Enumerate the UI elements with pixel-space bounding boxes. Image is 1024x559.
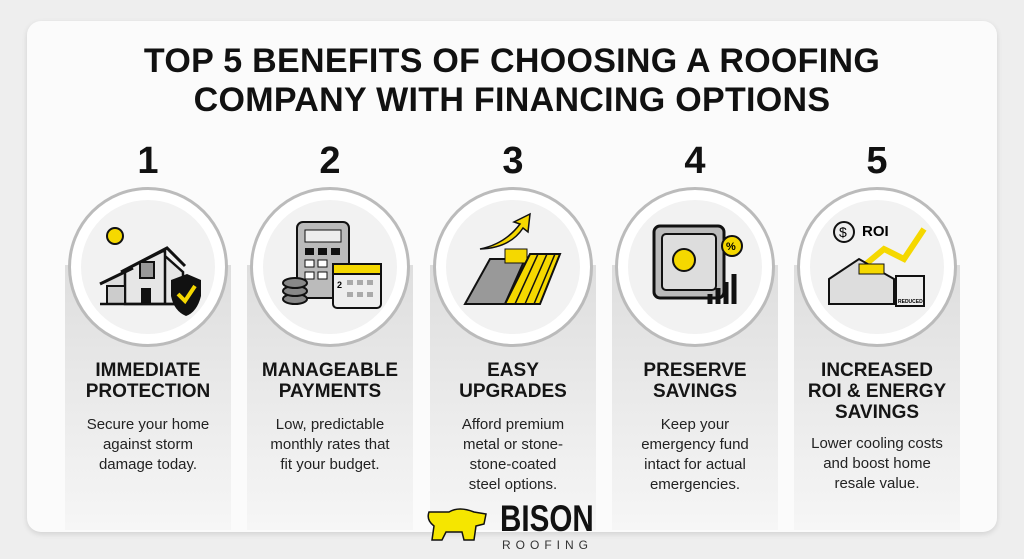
icon: safe: % bbox=[726, 241, 736, 253]
strip bbox=[794, 265, 960, 530]
text bbox=[462, 416, 564, 493]
number 1: 1 bbox=[137, 140, 159, 182]
text: Keep your bbox=[661, 416, 729, 433]
column 2 bbox=[247, 140, 413, 496]
heading bbox=[86, 360, 210, 402]
heading: ROI & ENERGY bbox=[808, 381, 946, 402]
brand text: BISON bbox=[500, 498, 594, 539]
heading: SAVINGS bbox=[835, 402, 919, 423]
column 1 bbox=[65, 140, 231, 496]
column 4 bbox=[612, 140, 778, 496]
number 2: 2 bbox=[319, 140, 341, 182]
text: stone-coated bbox=[470, 456, 556, 473]
strip bbox=[247, 265, 413, 530]
heading: MANAGEABLE bbox=[262, 360, 398, 381]
text: and boost home bbox=[823, 455, 931, 472]
icon: ROI house bbox=[797, 187, 957, 347]
heading: SAVINGS bbox=[653, 381, 737, 402]
icon: ROI house: $ bbox=[839, 224, 847, 240]
heading: PAYMENTS bbox=[279, 381, 381, 402]
heading: IMMEDIATE bbox=[95, 360, 201, 381]
logo bbox=[427, 498, 594, 552]
icon: house with shield bbox=[68, 187, 228, 347]
text: monthly rates that bbox=[270, 436, 390, 453]
heading bbox=[262, 360, 398, 402]
text: resale value. bbox=[834, 475, 920, 492]
heading: PROTECTION bbox=[86, 381, 210, 402]
icon: calculator and calendar bbox=[250, 187, 410, 347]
text: against storm bbox=[103, 436, 193, 453]
heading: EASY bbox=[487, 360, 539, 381]
text bbox=[270, 416, 390, 473]
text: Lower cooling costs bbox=[811, 435, 943, 452]
column 5 bbox=[794, 140, 960, 496]
text: Afford premium bbox=[462, 416, 564, 433]
text: Secure your home bbox=[87, 416, 209, 433]
number 3: 3 bbox=[502, 140, 524, 182]
text bbox=[641, 416, 749, 493]
heading bbox=[643, 360, 747, 402]
text bbox=[811, 435, 943, 492]
heading: UPGRADES bbox=[459, 381, 567, 402]
text: fit your budget. bbox=[280, 456, 380, 473]
text: emergencies. bbox=[650, 476, 740, 493]
text: intact for actual bbox=[644, 456, 746, 473]
icon: roof upgrade bbox=[433, 187, 593, 347]
heading bbox=[459, 360, 567, 402]
icon: safe bbox=[615, 187, 775, 347]
heading: PRESERVE bbox=[643, 360, 747, 381]
text: damage today. bbox=[99, 456, 197, 473]
title bbox=[144, 42, 880, 119]
text bbox=[87, 416, 209, 473]
column 3 bbox=[430, 140, 596, 496]
text: Low, predictable bbox=[276, 416, 384, 433]
text: metal or stone- bbox=[463, 436, 563, 453]
icon: bison bbox=[427, 508, 487, 541]
logo: ROOFING bbox=[502, 538, 593, 552]
title: COMPANY WITH FINANCING OPTIONS bbox=[194, 81, 830, 119]
strip bbox=[612, 265, 778, 530]
heading: INCREASED bbox=[821, 360, 933, 381]
icon: ROI house: REDUCED bbox=[898, 299, 923, 305]
strip bbox=[430, 265, 596, 530]
number 5: 5 bbox=[866, 140, 888, 182]
title: TOP 5 BENEFITS OF CHOOSING A ROOFING bbox=[144, 42, 880, 80]
strip bbox=[65, 265, 231, 530]
heading bbox=[808, 360, 946, 423]
text: steel options. bbox=[469, 476, 557, 493]
icon: calculator and calendar: 2 bbox=[337, 280, 342, 290]
text: emergency fund bbox=[641, 436, 749, 453]
number 4: 4 bbox=[684, 140, 706, 182]
icon: ROI house: ROI bbox=[862, 223, 889, 240]
